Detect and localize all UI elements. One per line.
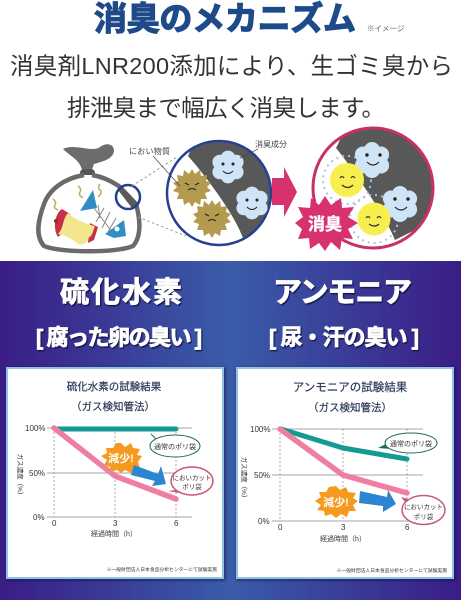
heading: ammonia: [ 尿・汗の臭い ] (269, 325, 419, 350)
chart grid and axes: 経過時間（h） (320, 534, 366, 543)
fish bones (80, 190, 126, 238)
intro text (10, 53, 453, 121)
pink line (54, 428, 176, 499)
heading: hydrogen sulfide: 硫化水素 (60, 276, 182, 309)
icon: odor particles (173, 169, 231, 238)
bubble: normal bag: 通常のポリ袋 (390, 439, 432, 448)
chart grid and axes: 6 (405, 523, 410, 532)
bubble: odor cut bag: においカット (404, 503, 443, 511)
chart title: 硫化水素の試験結果 (67, 380, 162, 393)
label: deodorant component: 消臭成分 (255, 139, 287, 149)
image note: ※イメージ (367, 24, 405, 33)
badge: deodorize (295, 196, 358, 251)
chart title: （ガス検知管法） (308, 401, 392, 414)
arrow (272, 167, 297, 217)
teal line (281, 429, 407, 459)
apple core (54, 209, 98, 244)
burst callout: 減少! (108, 451, 134, 465)
chart grid and axes: 100% (250, 425, 270, 434)
heading: hydrogen sulfide: [ 腐った卵の臭い ] (36, 325, 202, 350)
panel: blue band (0, 261, 461, 600)
bubble: odor cut bag (401, 496, 445, 524)
panel: chart hydrogen sulfide (7, 368, 223, 578)
chart grid and axes: 6 (174, 519, 179, 528)
burst callout (315, 486, 358, 518)
panel: chart ammonia (237, 368, 453, 578)
chart grid and axes: 3 (113, 519, 118, 528)
bubble: odor cut bag (168, 467, 213, 495)
icon: deodorant clouds (212, 151, 268, 219)
chart grid and axes: 0 (278, 523, 283, 532)
chart grid and axes: 0% (258, 517, 270, 526)
panel: deodorized circle (312, 126, 434, 250)
label: deodorant component (240, 139, 287, 158)
chart grid and axes: 0% (33, 513, 45, 522)
badge: deodorize: 消臭 (308, 215, 342, 234)
label: odor substance (129, 146, 180, 186)
chart grid and axes (240, 425, 423, 543)
blue arrow (131, 465, 166, 486)
intro text: 排泄臭まで幅広く消臭します。 (67, 95, 385, 121)
chart title: アンモニアの試験結果 (293, 380, 408, 394)
icon: clouds (355, 142, 417, 222)
chart title (293, 380, 408, 414)
footnote: ※一般財団法人日本食品分析センターにて試験実施 (107, 566, 217, 573)
heading: hydrogen sulfide (36, 276, 202, 350)
chart title (67, 380, 162, 413)
bubble: odor cut bag: ポリ袋 (182, 482, 202, 491)
smell lines (53, 184, 101, 210)
heading: ammonia: アンモニア (273, 277, 412, 309)
bubble: odor cut bag: においカット (172, 474, 212, 482)
blue arrow (359, 490, 396, 512)
pink line (280, 429, 407, 493)
chart title: （ガス検知管法） (71, 400, 155, 413)
icon: smiling suns (330, 163, 390, 236)
burst callout (101, 443, 142, 473)
chart grid and axes: 50% (29, 469, 45, 478)
chart grid and axes: 経過時間（h） (91, 529, 137, 538)
chart grid and axes: ガス濃度（%） (240, 457, 249, 501)
bubble: normal bag (378, 433, 437, 453)
bubble: normal bag (150, 434, 200, 457)
title: 消臭のメカニズム (94, 0, 356, 37)
teal line (55, 426, 176, 432)
panel: close-up circle (166, 140, 272, 246)
intro text: 消臭剤LNR200添加により、生ゴミ臭から (10, 53, 453, 79)
footnote: ※一般財団法人日本食品分析センターにて試験実施 (337, 567, 447, 574)
chart grid and axes: 100% (25, 424, 45, 433)
icon: magnifier circle (116, 157, 186, 236)
chart grid and axes: 50% (254, 471, 270, 480)
chart grid and axes: 3 (341, 523, 346, 532)
icon: garbage bag (38, 144, 139, 251)
chart grid and axes (16, 424, 192, 538)
label: odor substance: におい物質 (129, 146, 170, 156)
heading: ammonia (269, 277, 419, 350)
bubble: normal bag: 通常のポリ袋 (154, 442, 196, 451)
bubble: odor cut bag: ポリ袋 (414, 512, 434, 521)
chart grid and axes: 0 (52, 519, 57, 528)
chart grid and axes: ガス濃度（%） (16, 454, 25, 498)
burst callout: 減少! (323, 495, 349, 509)
